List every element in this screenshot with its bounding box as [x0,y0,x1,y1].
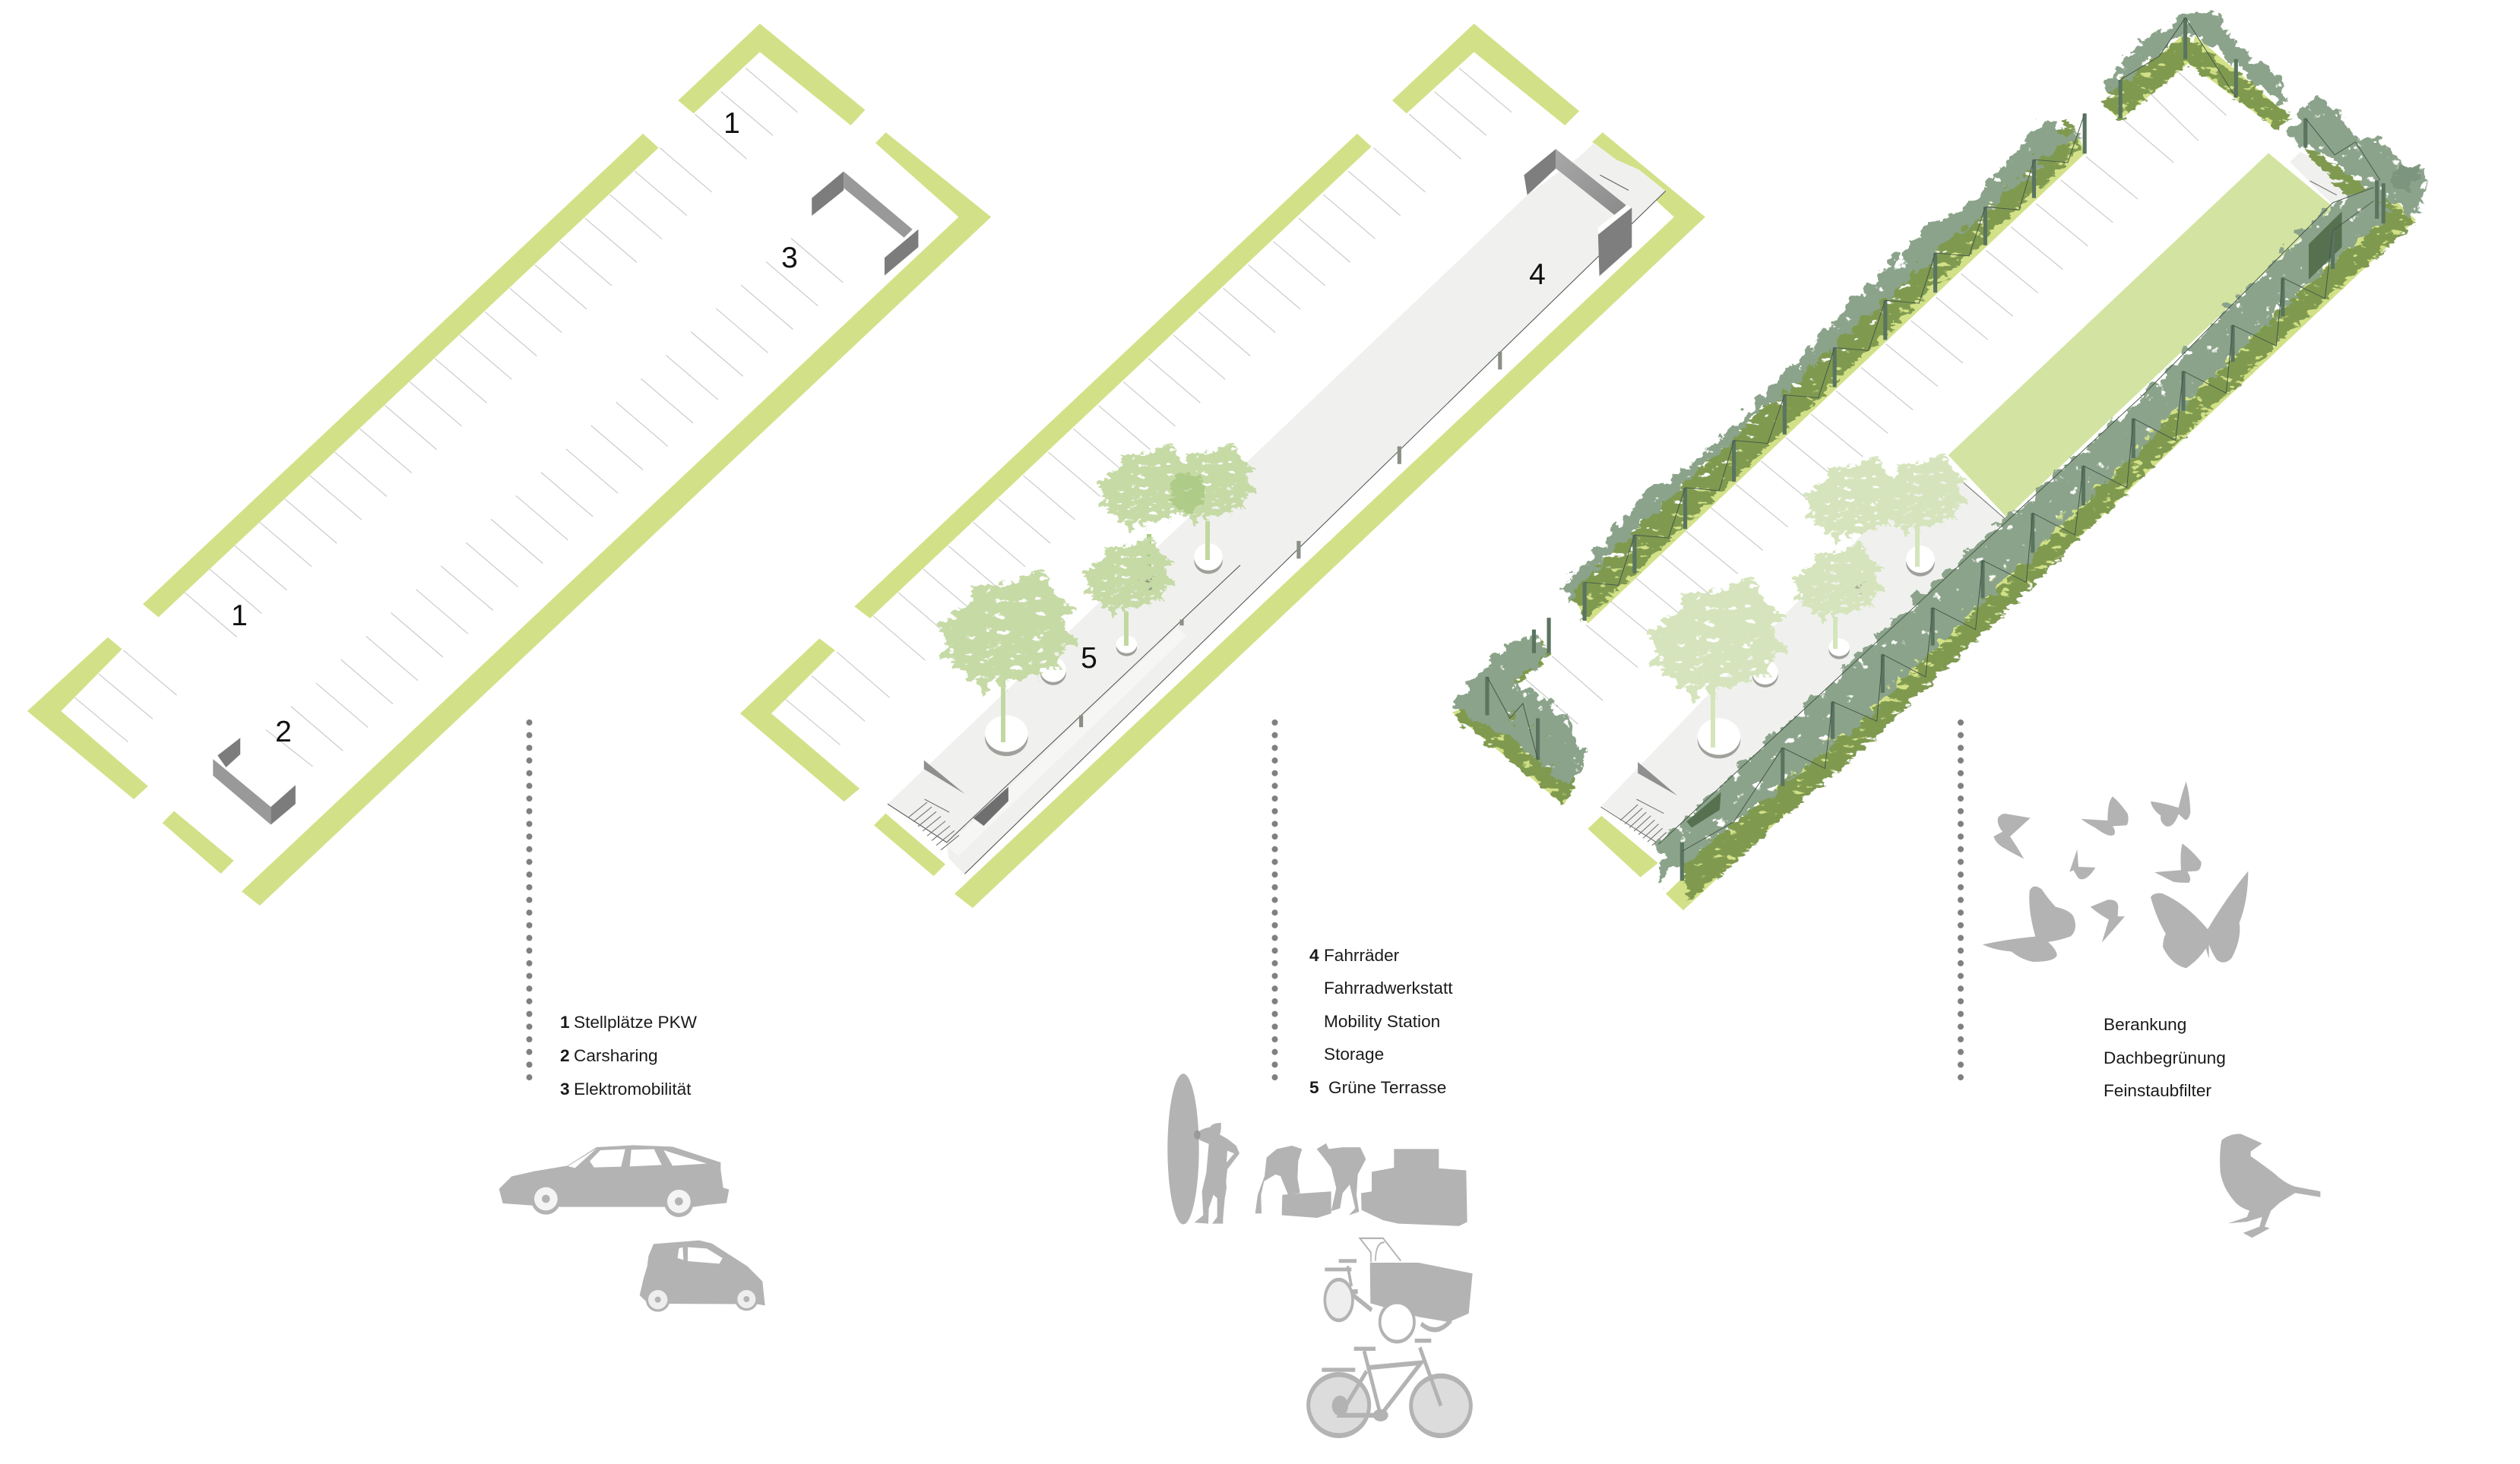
green frame remnants [1452,36,2416,910]
legend: parking: Stellplätze PKW [574,1013,698,1032]
icons: cars [499,1145,765,1312]
support columns [1081,352,1500,727]
icon: butterfly [2081,796,2129,836]
icons: butterflies and bird [1983,782,2320,1238]
legend: mobility: Grüne Terrasse [1328,1078,1446,1097]
terrace [1601,458,2007,844]
icon: large butterfly right [2151,871,2248,968]
terrace top end [2290,152,2363,207]
dark panels [1686,212,2342,827]
green frame [740,24,1705,908]
stairs and skylight marks [1600,181,2337,846]
legend: mobility: 5 [1309,1078,1319,1097]
icon: butterfly [2091,900,2125,943]
legend: greening: Dachbegrünung [2104,1048,2226,1067]
legend: mobility: Fahrräder [1324,946,1400,965]
icon: butterfly [2151,782,2190,827]
legend: mobility: 4 [1309,946,1319,965]
legend: greening: Berankung [2104,1015,2186,1034]
icon: stacked boxes [1361,1149,1467,1226]
legend: parking: 3 [560,1080,570,1099]
white gap beside the terrace [947,628,1187,856]
dotted divider 3 [1958,723,1964,1078]
icon: butterfly [2069,849,2095,879]
wall: bicycle storage [1524,149,1632,276]
icons: people and bikes [1167,1073,1473,1436]
green roof [1949,153,2334,517]
icon: standing person [1194,1123,1239,1224]
trees of greening panel [1648,457,1968,748]
legend: parking [560,1013,698,1099]
olive hedge bands [1453,36,2416,902]
legend: greening [2104,1015,2226,1100]
panel: parking deck with terrace [740,24,1705,908]
panel: parking deck with greening [1452,36,2416,910]
parking bay lines [1526,68,2226,724]
fence wires [1487,17,2380,851]
label: number 1: 1 [231,599,248,632]
wall: electric mobility [812,172,918,276]
label: number 3: 3 [781,242,798,274]
planters [1698,545,1935,758]
green frame [27,24,991,906]
label: number 1: 1 [723,107,740,140]
icon: small car [640,1241,765,1312]
icon: surfboard [1167,1073,1199,1225]
icon: cargo bike [1325,1238,1473,1342]
icon: bird [2220,1134,2320,1238]
legend: greening: Feinstaubfilter [2104,1081,2211,1100]
wall: carsharing [213,738,296,824]
label: number 4: 4 [1529,258,1546,291]
legend: mobility [1309,946,1453,1097]
terrace deck [888,143,1666,875]
legend: mobility: Storage [1324,1045,1384,1064]
dotted divider 1 [526,723,532,1078]
label: number 2: 2 [275,716,292,748]
icon: sedan [499,1145,729,1217]
planters [985,543,1223,756]
deck edge lines [888,175,1666,874]
trees of terrace panel [938,446,1257,742]
legend: mobility: Fahrradwerkstatt [1324,979,1453,998]
hedges of greening panel [1452,12,2424,902]
icon: butterfly [1993,814,2031,858]
legend: parking: 2 [560,1046,570,1065]
icon: people carrying box [1255,1143,1366,1218]
legend: parking: Elektromobilität [574,1080,692,1099]
icon: large butterfly left [1983,887,2075,962]
icon: butterfly [2154,843,2202,883]
legend: parking: Carsharing [574,1046,658,1065]
stairs [909,760,1008,850]
darker leaf patch at corner [2393,164,2419,191]
panel: parking deck plan [27,24,991,906]
legend: mobility: Mobility Station [1324,1012,1440,1031]
dotted divider 2 [1272,723,1278,1078]
icon: bicycle [1309,1341,1471,1436]
parking bay lines [786,68,1512,745]
label: number 5: 5 [1081,642,1097,675]
grey-green foliage [1452,12,2424,887]
legend: parking: 1 [560,1013,570,1032]
parking bay lines [74,68,843,767]
fence posts [1487,17,2383,881]
icon: hand overlap [1194,1130,1201,1139]
